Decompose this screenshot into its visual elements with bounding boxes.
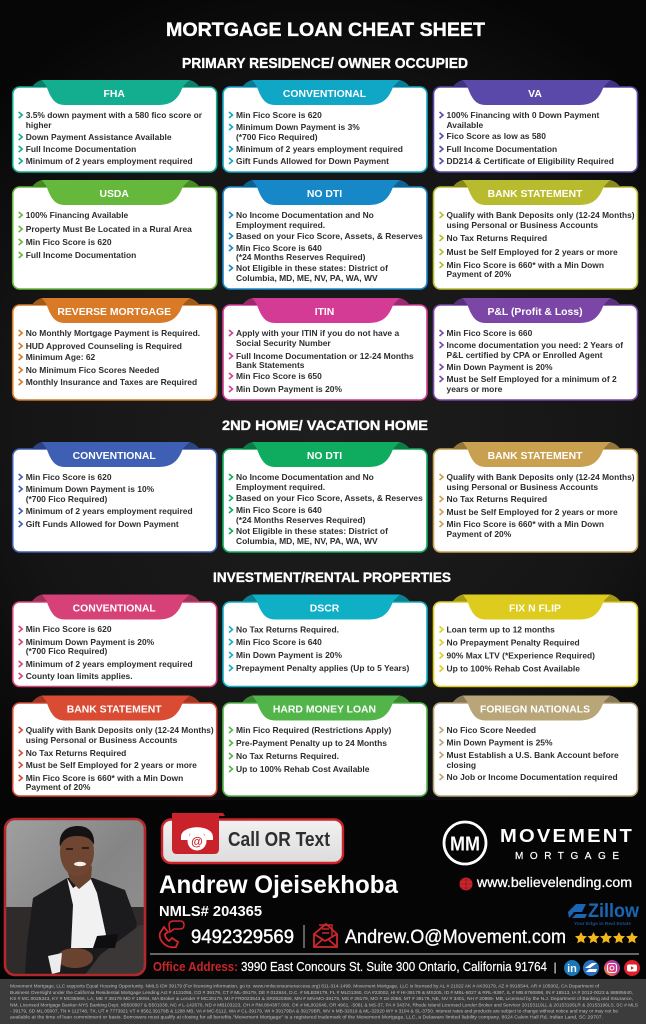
panel: Conventional investment: County loan limits applies. <box>26 671 133 681</box>
panel: Bank statement primary: Min Fico Score is 660* with a Min Down <box>446 260 604 270</box>
icon: phone <box>160 921 184 947</box>
panel: Conventional primary: (*700 Fico Required) <box>236 132 318 142</box>
panel: P&L <box>434 298 638 400</box>
panel: VA: Fico Score as low as 580 <box>446 131 546 141</box>
panel: Bank statement primary: BANK STATEMENT <box>488 189 583 200</box>
icon: mail <box>314 924 337 947</box>
panel: Bank statement second home: Payment of 20% <box>446 529 512 539</box>
panel: P&L: Min Fico Score is 660 <box>446 328 533 338</box>
panel: Bank statement primary: using Personal or Business Accounts <box>446 220 598 230</box>
panel: VA: VA <box>528 89 542 100</box>
panel: Conventional primary: Minimum of 2 years employment required <box>236 144 403 154</box>
panel: Conventional investment: Minimum Down Payment is 20% <box>26 637 155 647</box>
panel: FHA: Minimum of 2 years employment required <box>26 156 193 166</box>
panel: Hard money loan <box>223 696 427 796</box>
panel: No DTI second home: Not Eligible in these states: District of <box>236 526 388 536</box>
logo: Movement Mortgage: MORTGAGE <box>515 851 619 862</box>
panel: Conventional investment <box>13 594 217 686</box>
logo: Zillow: Zillow <box>588 901 639 922</box>
panel: Foreign nationals: closing <box>446 760 476 770</box>
NMLS number: NMLS# 204365 <box>159 904 262 920</box>
panel: Bank statement investment: Must be Self Employed for 2 years or more <box>26 760 197 770</box>
heading: primary residence: PRIMARY RESIDENCE/ OWNER OCCUPIED <box>182 56 468 72</box>
panel: No DTI primary: Min Fico Score is 640 <box>236 243 322 253</box>
panel: ITIN: Min Down Payment is 20% <box>236 384 342 394</box>
panel: Bank statement second home: Qualify with Bank Deposits only (12-24 Months) <box>446 472 635 482</box>
icon: telephone: @ <box>191 834 203 848</box>
panel: VA: Full Income Documentation <box>446 144 557 154</box>
agent name: Andrew Ojeisekhoba <box>159 871 399 899</box>
panel: Bank statement second home: Must be Self Employed for 2 years or more <box>446 507 618 517</box>
panel: FHA: 3.5% down payment with a 580 fico score or <box>26 110 203 120</box>
title: MORTGAGE LOAN CHEAT SHEET <box>166 20 485 41</box>
footer legal text: available at the time of loan commitment or basis. Borrowers must qualify at closing for all benefits."Movement Mortgage" is a registered trademark of the Movement Mortgage, LLC, a Delaware limited liability company. 8024 Calvin Hall Rd, Indian Land, SC 29707. <box>10 1014 603 1019</box>
panel: Bank statement investment: BANK STATEMENT <box>67 704 162 716</box>
panel: Conventional primary: CONVENTIONAL <box>283 89 367 100</box>
panel: Bank statement investment: using Personal or Business Accounts <box>26 735 178 745</box>
panel: Conventional second home: (*700 Fico Required) <box>26 494 107 504</box>
panel: No DTI second home: Employment required. <box>236 482 325 492</box>
panel: DSCR <box>223 594 427 686</box>
panel: DSCR: Min Fico Score is 640 <box>236 637 322 647</box>
panel: DSCR: Min Down Payment is 20% <box>236 650 342 660</box>
panel: No DTI primary: No Income Documentation and No <box>236 210 374 220</box>
panel: P&L: P&L (Profit & Loss) <box>487 307 583 318</box>
panel: Foreign nationals: No Fico Score Needed <box>446 725 536 735</box>
panel: Conventional primary: Minimum Down Payment is 3% <box>236 122 360 132</box>
panel: Bank statement investment: No Tax Returns Required <box>26 748 126 758</box>
panel: ITIN: ITIN <box>315 307 334 318</box>
website: www.believelending.com <box>476 874 632 890</box>
call or text badge <box>162 813 343 863</box>
panel: P&L: Must be Self Employed for a minimum of 2 <box>446 374 617 384</box>
panel: Fix n flip: No Prepayment Penalty Required <box>446 638 580 648</box>
panel: Reverse mortgage <box>13 298 217 400</box>
panel: No DTI primary: NO DTI <box>307 189 342 200</box>
phone number: 9492329569 <box>191 927 294 948</box>
panel: ITIN: Min Fico Score is 650 <box>236 371 322 381</box>
panel: Bank statement second home <box>434 442 638 552</box>
footer legal text: KS # MC.0025343, KY # MC85066, LA, ME # 39179 MD # 19094, MA Broker & Lender # MC39179, MI # FR0023543 & SR0020386, MN # MN-MO-39179, MS # 39179, MO # 18-2056, MT # 39179, NE, NV # 3401, NH # 20985- MB, Licensed by the N.J. Department of Banking and Insurance, <box>10 996 633 1001</box>
panel: Reverse mortgage: REVERSE MORTGAGE <box>57 307 171 318</box>
panel: FHA <box>13 80 217 172</box>
panel: Reverse mortgage: HUD Approved Counseling is Required <box>26 341 182 351</box>
heading: 2nd home: 2ND HOME/ VACATION HOME <box>222 417 428 433</box>
panel: DSCR: DSCR <box>310 604 340 614</box>
panel: Fix n flip: 90% Max LTV (*Experience Required) <box>446 650 595 660</box>
logo: Zillow: Your Edge in Real Estate <box>574 921 631 926</box>
panel: Bank statement investment <box>13 696 217 796</box>
panel: Bank statement second home: BANK STATEMENT <box>488 451 583 462</box>
panel: Hard money loan: No Tax Returns Required. <box>236 751 339 761</box>
panel: ITIN: Full Income Documentation or 12-24 Months <box>236 351 414 361</box>
call or text badge: Call OR Text <box>228 829 330 851</box>
panel: FHA: FHA <box>104 89 125 100</box>
panel: Hard money loan: Up to 100% Rehab Cost Available <box>236 764 370 774</box>
panel: Fix n flip <box>434 594 638 686</box>
panel: No DTI second home: Based on your Fico Score, Assets, & Reserves <box>236 493 423 503</box>
panel: DSCR: No Tax Returns Required. <box>236 624 339 634</box>
panel: ITIN <box>223 298 427 400</box>
logo: Movement Mortgage: MM <box>450 834 480 856</box>
panel: Conventional primary: Min Fico Score is 620 <box>236 110 322 120</box>
panel: Conventional second home <box>13 442 217 552</box>
panel: No DTI primary <box>223 180 427 289</box>
panel: Foreign nationals <box>434 696 638 796</box>
panel: ITIN: Bank Statements <box>236 360 305 370</box>
panel: ITIN: Apply with your ITIN if you do not have a <box>236 328 399 338</box>
panel: DSCR: Prepayment Penalty applies (Up to 5 Years) <box>236 663 410 673</box>
icon: telephone <box>181 827 213 850</box>
social icons <box>564 960 640 976</box>
panel: VA <box>434 80 638 172</box>
panel: FHA: Down Payment Assistance Available <box>26 132 172 142</box>
panel: VA: 100% Financing with 0 Down Payment <box>446 110 600 120</box>
logo: Movement Mortgage <box>444 822 634 864</box>
panel: USDA: Property Must Be Located in a Rural Area <box>26 224 192 234</box>
panel: P&L: Min Down Payment is 20% <box>446 362 553 372</box>
panel: No DTI primary: (*24 Months Reserves Required) <box>236 252 366 262</box>
panel: No DTI second home: NO DTI <box>307 451 342 462</box>
panel: ITIN: Social Security Number <box>236 338 331 348</box>
panel: Reverse mortgage: No Minimum Fico Scores Needed <box>26 365 159 375</box>
panel: Bank statement investment: Qualify with Bank Deposits only (12-24 Months) <box>26 725 214 735</box>
footer legal text: Movement Mortgage, LLC supports Equal Housing Opportunity. NMLS ID# 39179 (For licensing information, go to: www.nmlsconsumeraccess.org) 811-314-1499. Movement Mortgage, LLC is licensed by AL # 21022 AK # AK39179, AZ # 0918544, AR # 105002, CA Department of <box>10 984 600 989</box>
panel: USDA <box>13 180 217 289</box>
panel: Foreign nationals: Min Down Payment is 25% <box>446 738 553 748</box>
panel: Conventional second home: Minimum of 2 years employment required <box>26 506 193 516</box>
agent photo <box>5 819 145 975</box>
panel: No DTI second home: Min Fico Score is 640 <box>236 505 322 515</box>
panel: P&L: P&L certified by CPA or Enrolled Agent <box>446 350 603 360</box>
panel: Bank statement primary: Must be Self Employed for 2 years or more <box>446 247 618 257</box>
panel: Bank statement second home: Min Fico Score is 660* with a Min Down <box>446 519 604 529</box>
panel: Reverse mortgage: Minimum Age: 62 <box>26 352 96 362</box>
panel: USDA: 100% Financing Available <box>26 210 129 220</box>
office address: | <box>553 960 557 974</box>
panel: Hard money loan: Min Fico Required (Restrictions Apply) <box>236 725 392 735</box>
panel: FHA: higher <box>26 120 52 130</box>
office address: 3990 East Concours St. Suite 300 Ontario, California 91764 <box>241 960 547 974</box>
panel: Conventional second home: CONVENTIONAL <box>73 451 156 462</box>
panel: No DTI primary: Not Eligible in these states: District of <box>236 263 388 273</box>
icon: globe <box>460 878 472 890</box>
office address: Office Address: <box>153 960 238 974</box>
panel: P&L: years or more <box>446 384 503 394</box>
panel: Bank statement primary: No Tax Returns Required <box>446 233 547 243</box>
panel: Conventional second home: Min Fico Score is 620 <box>26 472 112 482</box>
panel: Conventional second home: Minimum Down Payment is 10% <box>26 484 155 494</box>
panel: Bank statement second home: using Personal or Business Accounts <box>446 482 598 492</box>
panel: Conventional investment: Minimum of 2 years employment required <box>26 659 193 669</box>
panel: FHA: Full Income Documentation <box>26 144 136 154</box>
footer legal text: - 39179, SD ML.05007, TN # 112748, TX, UT # 7773921 VT # 6562,39179B & 1288 MB, VA # MC-5112, WA # CL-39179, WI # 39179BA & 39179BR, WV # MB-32019 & ML-32020 WY # 3104 & SL-3750. Interest rates and products are subject to change without notice and may or may not be <box>10 1008 618 1013</box>
heading: investment: INVESTMENT/RENTAL PROPERTIES <box>213 569 451 585</box>
footer legal text: Business Oversight under the California Residential Mortgage Lending Act # 4131056, CO # 39179, CT # ML-39179, DE # 012844, D.C. # MLB39179, FL # MLD1360, GA #23002, HI # HI-39179 & MS205, ID # MBL-8027 & RRL-9397, IL # MB.6760898, IN # 18513, IA # 2013-0023 & 88885640, <box>10 990 633 995</box>
panel: Conventional second home: Gift Funds Allowed for Down Payment <box>26 519 179 529</box>
panel: Conventional investment: Min Fico Score is 620 <box>26 624 112 634</box>
logo: Zillow <box>568 901 639 926</box>
panel: No DTI second home: (*24 Months Reserves Required) <box>236 515 366 525</box>
panel: Hard money loan: HARD MONEY LOAN <box>273 704 376 716</box>
panel: USDA: Full Income Documentation <box>26 250 136 260</box>
panel: Conventional investment: (*700 Fico Required) <box>26 646 107 656</box>
panel: Reverse mortgage: Monthly Insurance and Taxes are Required <box>26 377 197 387</box>
panel: Foreign nationals: Must Establish a U.S. Bank Account before <box>446 750 619 760</box>
panel: No DTI second home: No Income Documentation and No <box>236 472 374 482</box>
panel: No DTI second home: Columbia, MD, ME, NV, PA, WA, WV <box>236 536 378 546</box>
panel: Conventional primary <box>223 80 427 172</box>
panel: USDA: USDA <box>99 189 129 200</box>
panel: Fix n flip: Up to 100% Rehab Cost Available <box>446 664 580 674</box>
panel: USDA: Min Fico Score is 620 <box>26 237 112 247</box>
panel: Conventional investment: CONVENTIONAL <box>73 604 156 614</box>
panel: Bank statement second home: No Tax Returns Required <box>446 494 547 504</box>
panel: Bank statement investment: Payment of 20% <box>26 782 91 792</box>
panel: Fix n flip: Loan term up to 12 months <box>446 624 555 634</box>
panel: Bank statement primary: Payment of 20% <box>446 269 512 279</box>
panel: Foreign nationals: FORIEGN NATIONALS <box>480 704 590 716</box>
panel: Fix n flip: FIX N FLIP <box>509 604 561 614</box>
panel: Bank statement investment: Min Fico Score is 660* with a Min Down <box>26 773 183 783</box>
panel: No DTI primary: Employment required. <box>236 220 325 230</box>
email: Andrew.O@Movement.com <box>345 927 566 948</box>
panel: Hard money loan: Pre-Payment Penalty up to 24 Months <box>236 738 387 748</box>
panel: VA: Available <box>446 120 484 130</box>
panel: No DTI primary: Based on your Fico Score, Assets, & Reserves <box>236 231 423 241</box>
panel: Bank statement primary <box>434 180 638 289</box>
panel: P&L: Income documentation you need: 2 Years of <box>446 340 623 350</box>
panel: No DTI primary: Columbia, MD, ME, NV, PA, WA, WV <box>236 273 378 283</box>
panel: Conventional primary: Gift Funds Allowed for Down Payment <box>236 156 389 166</box>
logo: Movement Mortgage: MOVEMENT <box>500 825 634 846</box>
panel: VA: DD214 & Certificate of Eligibility Required <box>446 156 614 166</box>
panel: Bank statement primary: Qualify with Bank Deposits only (12-24 Months) <box>446 210 635 220</box>
footer legal text <box>0 979 646 1024</box>
social icons: in <box>567 963 577 975</box>
five star rating <box>575 932 638 943</box>
panel: No DTI second home <box>223 442 427 552</box>
footer legal text: NM, Licensed Mortgage Banker-NYS Banking Dept. #B500997 & B501039, NC # L-142670, ND # MB103223, OH # RM.804387.000, OK # ML002646, OR 4961, -5081 & MS-37, PA # 34374, Rhode Island Licensed Lender Broker and Servicer 20153119LL & 20153195LR & 20153196LS, SC # MLS <box>10 1002 638 1007</box>
panel: Foreign nationals: No Job or Income Documentation required <box>446 772 618 782</box>
panel: Reverse mortgage: No Monthly Mortgage Payment is Required. <box>26 328 200 338</box>
